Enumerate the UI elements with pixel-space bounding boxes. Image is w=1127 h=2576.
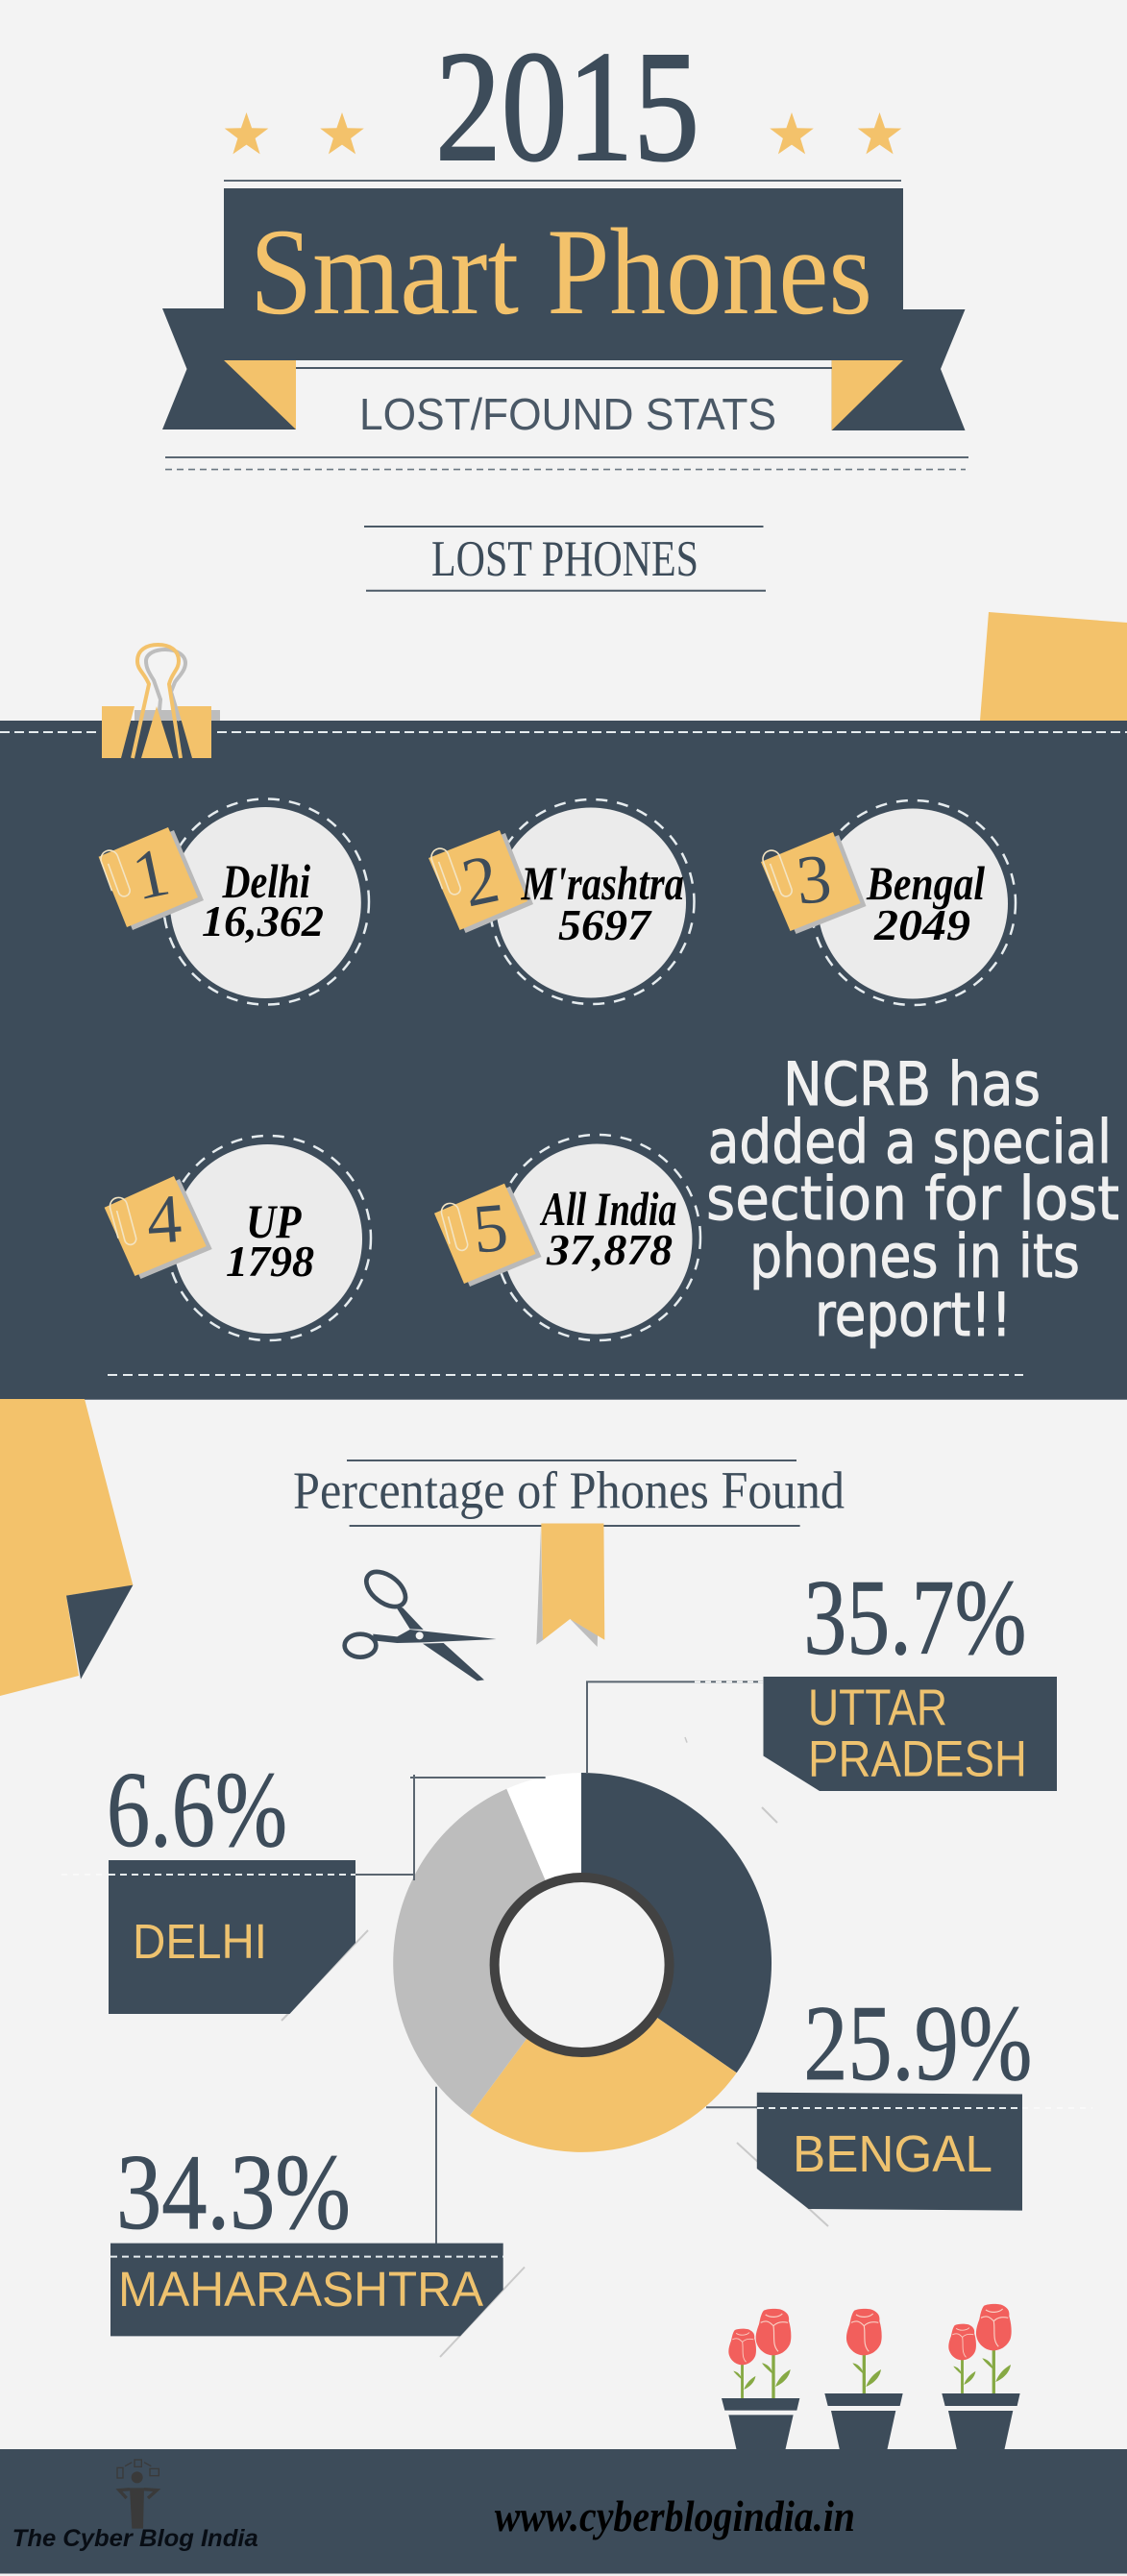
icon: scissors (345, 1565, 497, 1681)
icon: logo figure juggling devices (117, 2460, 159, 2529)
heading: lost phones: LOST PHONES (431, 531, 698, 587)
tulip: pot 2 (846, 2309, 882, 2393)
icon: potted flowers (722, 2304, 1020, 2450)
stat: Delhi: DELHI (133, 1914, 267, 1969)
sticker: number 2 (429, 830, 527, 930)
sticker: number 5: 5 (470, 1189, 511, 1268)
text: Delhi count: 16,362 (202, 896, 324, 945)
tulip: pot 3 large (976, 2304, 1012, 2393)
text: Maharashtra count: M'rashtra (521, 856, 684, 910)
text: Delhi count: Delhi (222, 854, 310, 908)
stat: Uttar Pradesh: PRADESH (808, 1731, 1027, 1787)
decorative paper corner: top right (980, 612, 1127, 721)
stat: Bengal (706, 1984, 1092, 2226)
callout: NCRB note (706, 1049, 1119, 1350)
stat: Uttar Pradesh: UTTAR (808, 1680, 947, 1736)
callout: NCRB note: report!! (815, 1280, 1012, 1350)
item 3: Bengal (760, 800, 1016, 1005)
tulip: pot 3 small (948, 2324, 976, 2393)
text: UP count (226, 1194, 314, 1286)
stat: Bengal: BENGAL (793, 2125, 992, 2183)
text: All India count: 37,878 (546, 1225, 673, 1274)
tulip: pot 1 small (728, 2329, 756, 2398)
callout: NCRB note: phones in its (749, 1221, 1080, 1291)
text: UP count: 1798 (226, 1237, 314, 1286)
text: All India count (539, 1182, 676, 1274)
sticker: number 5 (434, 1184, 536, 1284)
text: Bengal count (866, 856, 985, 949)
pot 1 (722, 2398, 799, 2450)
stat: Delhi: 6.6% (107, 1751, 287, 1870)
icon: stars (225, 112, 901, 154)
donut chart: percentage found (393, 1773, 772, 2152)
icon: bookmark ribbon (536, 1524, 604, 1647)
sticker: number 2: 2 (455, 840, 505, 921)
text: Maharashtra count (521, 856, 684, 949)
callout: NCRB note: NCRB has (783, 1049, 1041, 1119)
subtitle: lost/found stats: LOST/FOUND STATS (359, 389, 776, 439)
sticker: number 4 (105, 1176, 207, 1276)
text: UP count: UP (246, 1194, 302, 1248)
pot 2 (824, 2393, 903, 2450)
text: All India count: All India (539, 1182, 676, 1236)
item 1: Delhi (98, 799, 369, 1005)
banner: Smart Phones ribbon (162, 188, 965, 430)
sticker: number 3: 3 (793, 840, 834, 920)
stat: Delhi (61, 1751, 546, 2021)
pot 3 (942, 2393, 1020, 2450)
panel: footer (0, 2449, 1127, 2573)
text: The Cyber Blog India: The Cyber Blog India (12, 2525, 258, 2552)
item 4: UP (105, 1136, 371, 1340)
heading: Smart Phones: Smart Phones (250, 203, 872, 340)
text: website url: www.cyberblogindia.in (495, 2491, 855, 2540)
sticker: number 4: 4 (144, 1180, 184, 1259)
stat: Maharashtra: 34.3% (116, 2133, 351, 2252)
decorative paper fold: left (0, 1399, 133, 1696)
tulip: pot 1 large (756, 2309, 791, 2398)
text: Delhi count (202, 854, 324, 945)
sticker: number 1 (98, 827, 198, 927)
text: Bengal count: Bengal (866, 856, 985, 910)
stat: Uttar Pradesh (587, 1558, 1057, 1823)
title: 2015: 2015 (435, 18, 699, 194)
heading: percentage of phones found: Percentage of Phones Found (293, 1461, 845, 1520)
stat: Maharashtra: MAHARASHTRA (118, 2262, 483, 2317)
panel: lost phones (0, 645, 1127, 1400)
stat: Uttar Pradesh: 35.7% (803, 1558, 1026, 1678)
icon: binder clip (102, 645, 220, 758)
stat: Maharashtra (110, 2087, 525, 2357)
item 2: Maharashtra (429, 799, 694, 1004)
sticker: number 1: 1 (126, 833, 176, 915)
sticker: number 3 (760, 832, 861, 931)
item 5: All India (434, 1135, 700, 1340)
text: Maharashtra count: 5697 (558, 900, 652, 949)
stat: Bengal: 25.9% (803, 1984, 1032, 2103)
text: Bengal count: 2049 (873, 900, 970, 949)
